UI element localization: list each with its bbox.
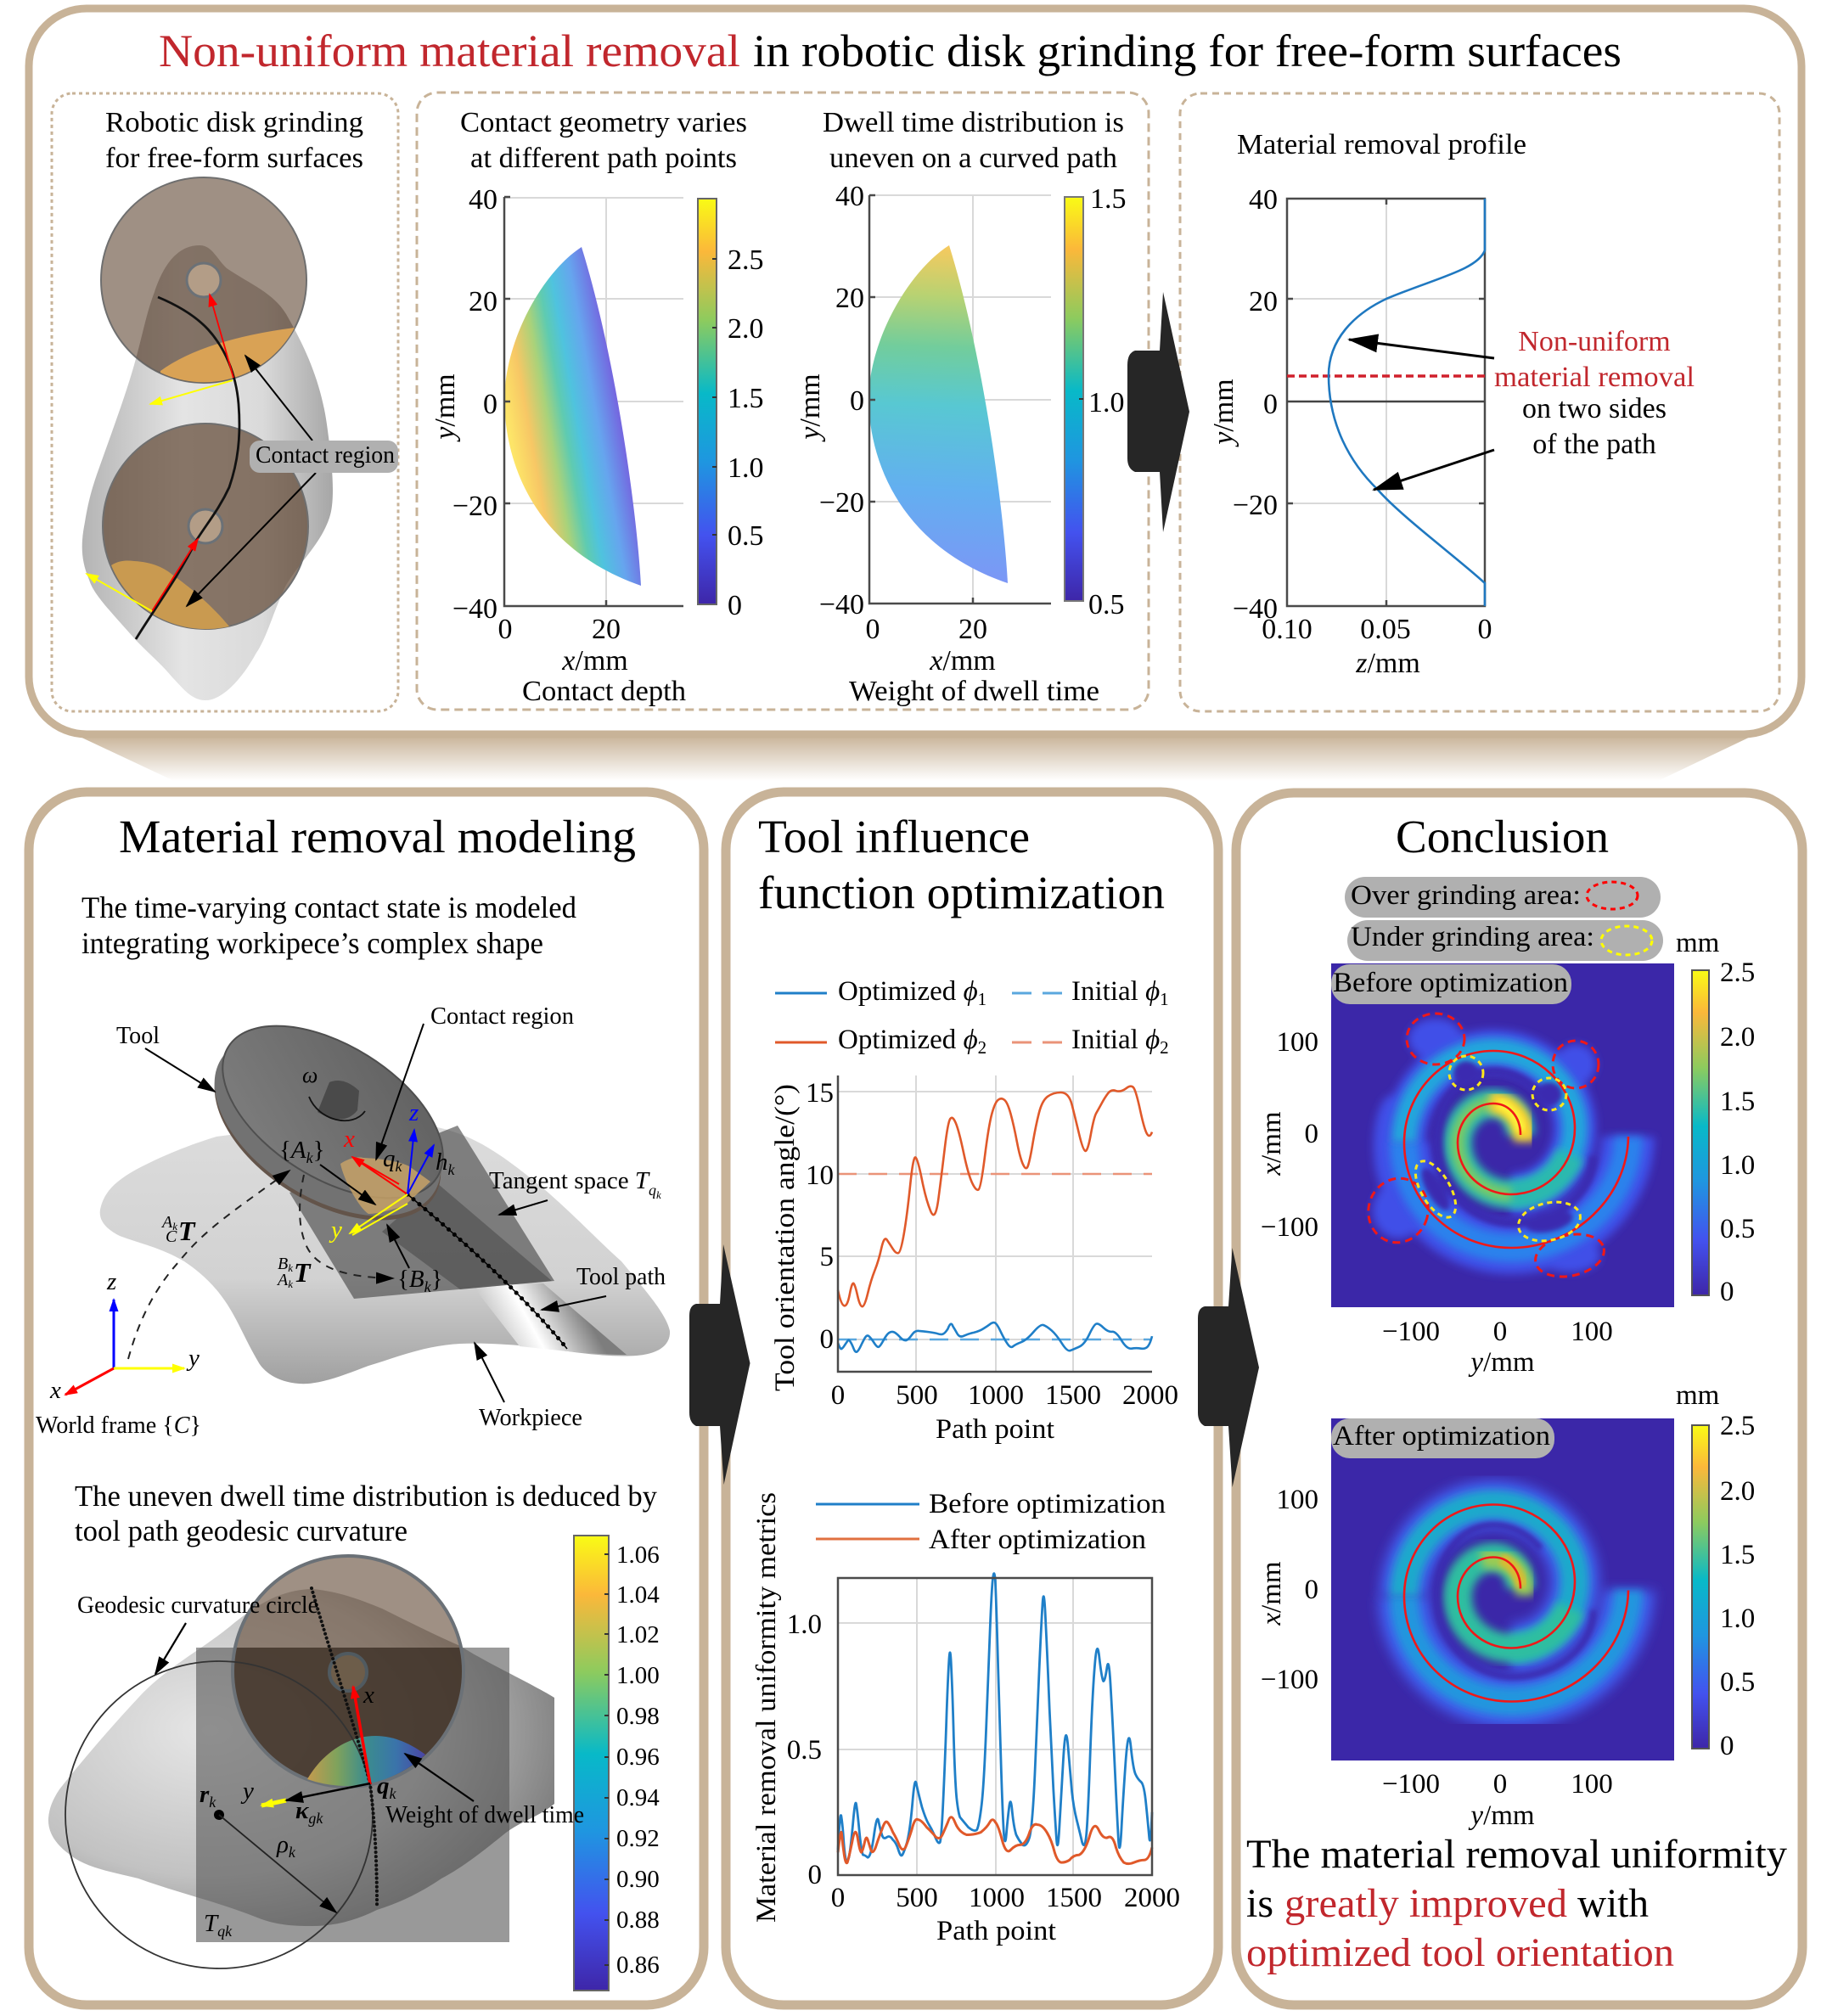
contact region patch bbox=[340, 1157, 430, 1214]
labels: geodesic diagram: k bbox=[289, 1844, 296, 1861]
heading: tool influence function optimization: function optimization bbox=[758, 867, 1165, 918]
arrow: optimization to conclusion bbox=[1198, 1248, 1259, 1487]
labels: 3D diagram: h bbox=[436, 1148, 448, 1176]
icon: lower grinding disk bbox=[103, 424, 308, 629]
dashed transforms bbox=[128, 1171, 393, 1359]
title bbox=[159, 25, 1622, 76]
text: dwell time description: The uneven dwell time distribution is deduced by bbox=[75, 1480, 657, 1513]
labels: geodesic diagram: x bbox=[363, 1682, 374, 1709]
legend: under grinding area: Under grinding area: bbox=[1351, 922, 1594, 952]
chart: heatmap before optimization: 0 bbox=[1304, 1119, 1318, 1149]
legend: orientation angle: 1 bbox=[978, 989, 986, 1009]
workpiece bbox=[82, 245, 333, 700]
panel: contact geometry and dwell time bbox=[417, 93, 1149, 710]
legend: orientation angle: 2 bbox=[1160, 1037, 1169, 1058]
panel: material removal profile bbox=[1180, 93, 1779, 711]
colorbar: before optimization: 1.5 bbox=[1720, 1087, 1755, 1117]
labels: 3D diagram: } bbox=[313, 1137, 325, 1164]
labels: 3D diagram: k bbox=[172, 1220, 177, 1233]
chart: dwell time weight: −20 bbox=[819, 487, 864, 519]
chart: dwell time weight: Weight of dwell time bbox=[849, 676, 1099, 707]
labels: 3D diagram: q bbox=[649, 1182, 656, 1199]
legend: orientation angle: 2 bbox=[978, 1037, 986, 1058]
chart: dwell time weight: −40 bbox=[819, 589, 864, 621]
chart: contact depth: 20 bbox=[592, 614, 621, 645]
chart: heatmap after optimization: 0 bbox=[1493, 1769, 1507, 1800]
labels: 3D diagram: A bbox=[162, 1213, 172, 1232]
tangent plane square bbox=[196, 1648, 509, 1942]
chart: material removal uniformity: Material removal uniformity metrics bbox=[751, 1492, 782, 1923]
colorbar: contact depth bbox=[698, 199, 764, 621]
chart: material removal uniformity: 0 bbox=[831, 1883, 845, 1913]
chart: contact depth: y/mm bbox=[430, 373, 461, 442]
labels: 3D diagram: } bbox=[431, 1266, 443, 1293]
chart: heatmap after optimization: 0 bbox=[1304, 1575, 1318, 1605]
colorbar: contact depth: 1.0 bbox=[728, 452, 764, 484]
heading: robotic disk grinding bbox=[105, 107, 363, 174]
label arrows bbox=[155, 1623, 474, 1801]
heading: robotic disk grinding: Robotic disk grinding bbox=[105, 107, 363, 138]
labels: 3D diagram: Tangent space T bbox=[489, 1167, 649, 1194]
labels: geodesic diagram: Geodesic curvature circle bbox=[77, 1592, 318, 1619]
labels: 3D diagram: y bbox=[186, 1345, 200, 1372]
labels: 3D diagram: z bbox=[106, 1268, 116, 1295]
colorbar: before optimization: 0.5 bbox=[1720, 1214, 1755, 1244]
arrows: yellow tool direction bbox=[87, 380, 233, 611]
labels: 3D diagram: Tool path bbox=[576, 1263, 666, 1290]
labels: 3D diagram: k bbox=[424, 1278, 432, 1295]
label: after optimization: After optimization bbox=[1333, 1421, 1550, 1452]
icon: upper grinding disk bbox=[100, 177, 307, 384]
labels: 3D diagram: {A bbox=[279, 1137, 306, 1164]
heading: material removal modeling: Material removal modeling bbox=[119, 811, 636, 862]
chart: removal profile: 0.10 bbox=[1262, 614, 1312, 645]
text: contact state description bbox=[82, 890, 576, 960]
colorbar: dwell weight: 0.88 bbox=[616, 1906, 660, 1934]
text: dwell time description: tool path geodesic curvature bbox=[75, 1514, 408, 1547]
colorbar: dwell weight: 0.98 bbox=[616, 1703, 660, 1730]
panel: top overview bbox=[29, 8, 1801, 734]
tool disk bbox=[233, 1556, 464, 1787]
heading: dwell time: uneven on a curved path bbox=[829, 143, 1117, 174]
chart: removal profile: −40 bbox=[1233, 593, 1278, 625]
labels: geodesic diagram: y bbox=[240, 1777, 254, 1805]
labels: 3D diagram: x bbox=[343, 1126, 355, 1153]
labels: 3D diagram: ω bbox=[302, 1063, 318, 1087]
world frame axes bbox=[65, 1300, 184, 1395]
chart: tool orientation angle: 2000 bbox=[1122, 1380, 1178, 1411]
chart: dwell time weight: 40 bbox=[835, 181, 864, 212]
panel: material removal modeling bbox=[29, 792, 704, 2005]
chart: heatmap before optimization: 0 bbox=[1493, 1317, 1507, 1347]
chart: heatmap before optimization: x/mm bbox=[1256, 1111, 1287, 1176]
arrows: red tool direction bbox=[152, 295, 233, 611]
chart: contact depth: −20 bbox=[452, 491, 497, 522]
arrow: top panels to profile bbox=[1127, 292, 1189, 532]
heat: after spiral bbox=[1404, 1504, 1628, 1701]
labels: 3D diagram: World frame {C} bbox=[36, 1412, 201, 1439]
conclusion text: with bbox=[1577, 1881, 1649, 1926]
heading: dwell time bbox=[823, 107, 1124, 174]
chart: tool orientation angle: 0 bbox=[820, 1324, 834, 1355]
chart: contact depth: −40 bbox=[452, 593, 497, 625]
colorbar: before optimization: 2.5 bbox=[1720, 957, 1755, 988]
colorbar: dwell weight: 1.06 bbox=[616, 1541, 660, 1569]
labels: 3D diagram: k bbox=[288, 1261, 293, 1274]
chart: heatmap before optimization: y/mm bbox=[1468, 1347, 1535, 1378]
chart: removal profile: 40 bbox=[1249, 184, 1278, 216]
legend: uniformity metrics: After optimization bbox=[929, 1525, 1146, 1555]
colorbar: after optimization: 1.5 bbox=[1720, 1540, 1755, 1570]
workpiece top view bbox=[48, 1589, 554, 1926]
legend: orientation angle: Optimized ϕ bbox=[838, 976, 978, 1007]
heading: tool influence function optimization bbox=[758, 811, 1165, 918]
path: before red spiral bbox=[1404, 1051, 1628, 1248]
rotation arrow omega bbox=[309, 1097, 365, 1120]
chart: removal profile: −20 bbox=[1233, 490, 1278, 521]
colorbar: after optimization: 0 bbox=[1720, 1731, 1734, 1761]
tool path curve bbox=[136, 297, 239, 639]
labels: geodesic diagram: κ bbox=[295, 1797, 308, 1824]
colorbar: dwell weight: 1.04 bbox=[616, 1581, 660, 1609]
labels: 3D diagram: k bbox=[288, 1278, 293, 1290]
chart: tool orientation angle: 1000 bbox=[968, 1380, 1024, 1411]
chart: tool orientation angle: Tool orientation angle/(°) bbox=[770, 1084, 801, 1391]
colorbar: before optimization: 2.0 bbox=[1720, 1022, 1755, 1053]
heading: material removal profile: Material removal profile bbox=[1237, 129, 1526, 160]
heading: contact geometry: Contact geometry varies bbox=[460, 107, 747, 138]
chart: tool orientation angle: Path point bbox=[936, 1414, 1054, 1445]
diagram: 3D tool and workpiece bbox=[36, 991, 670, 1439]
colorbar: dwell time bbox=[1065, 183, 1126, 621]
callout: non-uniform removal: on two sides bbox=[1522, 393, 1667, 424]
colorbar: after optimization: 0.5 bbox=[1720, 1667, 1755, 1698]
legend: orientation angle: Initial ϕ bbox=[1071, 976, 1160, 1007]
labels: 3D diagram bbox=[36, 1002, 666, 1439]
colorbar: dwell time: 0.5 bbox=[1088, 589, 1124, 621]
chart: tool orientation angle: 10 bbox=[806, 1160, 834, 1191]
conclusion text: optimized tool orientation bbox=[1246, 1930, 1674, 1975]
chart: contact depth: x/mm bbox=[561, 645, 628, 677]
labels: geodesic diagram: k bbox=[389, 1785, 397, 1802]
chart: dwell time weight: x/mm bbox=[929, 645, 996, 677]
labels: 3D diagram: y bbox=[329, 1216, 342, 1244]
chart: material removal uniformity: Path point bbox=[936, 1916, 1056, 1946]
legend: under grinding area bbox=[1347, 920, 1663, 961]
heat: dark gap between loops bbox=[1416, 1061, 1593, 1237]
workpiece 3D bbox=[100, 1120, 670, 1384]
chart: material removal uniformity: 1.0 bbox=[787, 1609, 822, 1640]
panel: robotic disk grinding bbox=[52, 93, 398, 711]
labels: 3D diagram: T bbox=[178, 1216, 196, 1246]
callout: non-uniform removal: material removal bbox=[1494, 362, 1695, 393]
radius marker bbox=[214, 1810, 336, 1912]
colorbar: contact depth: 2.0 bbox=[728, 313, 764, 345]
colorbar: dwell time: 1.0 bbox=[1088, 387, 1124, 418]
labels: 3D diagram: Contact region bbox=[430, 1002, 574, 1030]
heading: conclusion: Conclusion bbox=[1396, 811, 1609, 862]
callout: non-uniform removal bbox=[1494, 326, 1695, 460]
colorbar: contact depth: 1.5 bbox=[728, 383, 764, 414]
chart: material removal uniformity: 0.5 bbox=[787, 1735, 822, 1766]
chart: tool orientation angle: 5 bbox=[820, 1242, 834, 1272]
labels: 3D diagram: k bbox=[306, 1149, 314, 1166]
text: contact state description: integrating workipece’s complex shape bbox=[82, 926, 543, 960]
panel: tool influence function optimization bbox=[726, 792, 1218, 2005]
chart: removal profile: 0 bbox=[1263, 389, 1278, 420]
chart: heatmap before optimization: 100 bbox=[1277, 1027, 1318, 1058]
chart: heatmap after optimization: x/mm bbox=[1256, 1561, 1287, 1626]
labels: 3D diagram: x bbox=[49, 1377, 61, 1404]
chart: material removal uniformity: 500 bbox=[896, 1883, 938, 1913]
chart: contact depth: Contact depth bbox=[522, 676, 686, 707]
legend: orientation angle bbox=[775, 976, 1169, 1058]
colorbar: dwell weight bbox=[574, 1536, 660, 1991]
labels: 3D diagram: B bbox=[278, 1255, 288, 1273]
chart: heatmap before optimization: 100 bbox=[1571, 1317, 1613, 1347]
chart: tool orientation angle: 0 bbox=[831, 1380, 845, 1411]
chart: dwell time weight: 20 bbox=[958, 614, 987, 645]
colorbar: dwell weight: 1.02 bbox=[616, 1621, 660, 1648]
chart: tool orientation angle: 500 bbox=[896, 1380, 938, 1411]
chart: removal profile: 0 bbox=[1477, 614, 1492, 645]
heading: dwell time: Dwell time distribution is bbox=[823, 107, 1124, 138]
text: dwell time description bbox=[75, 1480, 657, 1547]
chart: removal profile bbox=[1208, 184, 1492, 679]
chart: dwell time weight: 0 bbox=[866, 614, 880, 645]
heading: tool influence function optimization: Tool influence bbox=[758, 811, 1030, 862]
chart: material removal uniformity: 0 bbox=[808, 1860, 822, 1890]
conclusion text: The material removal uniformity bbox=[1246, 1832, 1787, 1877]
labels: 3D diagram: A bbox=[278, 1271, 288, 1289]
chart: contact depth: 0 bbox=[483, 389, 497, 420]
tangent plane bbox=[289, 1126, 554, 1299]
title: in robotic disk grinding for free-form surfaces bbox=[753, 25, 1622, 76]
local frame axes bbox=[350, 1130, 434, 1235]
colorbar: before optimization: mm bbox=[1676, 928, 1720, 958]
chart: removal profile: y/mm bbox=[1208, 379, 1239, 447]
chart: removal profile: z/mm bbox=[1355, 648, 1420, 679]
conclusion text: greatly improved bbox=[1284, 1881, 1567, 1926]
colorbar: dwell weight: 0.92 bbox=[616, 1825, 660, 1852]
labels: 3D diagram: {B bbox=[397, 1266, 424, 1293]
chart: heatmap after optimization: −100 bbox=[1382, 1769, 1440, 1800]
chart: material removal uniformity: 1500 bbox=[1046, 1883, 1102, 1913]
colorbar: after optimization: 2.0 bbox=[1720, 1476, 1755, 1507]
legend: orientation angle: 1 bbox=[1160, 989, 1169, 1009]
label: before optimization: Before optimization bbox=[1333, 968, 1568, 998]
label: contact region: Contact region bbox=[256, 441, 395, 469]
callout: non-uniform removal: Non-uniform bbox=[1518, 326, 1671, 357]
chart: heatmap after optimization: −100 bbox=[1261, 1665, 1318, 1695]
chart: dwell time weight: 0 bbox=[850, 385, 864, 417]
labels: geodesic diagram: T bbox=[204, 1910, 217, 1937]
colorbar: dwell time: 1.5 bbox=[1090, 183, 1126, 215]
labels: geodesic diagram bbox=[77, 1592, 584, 1940]
chart: material removal uniformity: 1000 bbox=[969, 1883, 1025, 1913]
labels: geodesic diagram: r bbox=[200, 1781, 209, 1808]
label arrows bbox=[145, 1024, 606, 1402]
heat: dark gap between loops bbox=[1436, 1525, 1593, 1677]
labels: geodesic diagram: k bbox=[209, 1794, 216, 1811]
chart: heatmap before optimization: −100 bbox=[1261, 1212, 1318, 1243]
labels: 3D diagram: q bbox=[383, 1145, 396, 1172]
chart: contact depth: 40 bbox=[469, 184, 497, 216]
colorbar: contact depth: 2.5 bbox=[728, 244, 764, 276]
arrows: contact region pointers bbox=[187, 356, 316, 606]
chart: contact depth bbox=[430, 184, 686, 707]
connector: gradient funnel below top panel bbox=[76, 735, 1754, 781]
legend: over grinding area: Over grinding area: bbox=[1351, 880, 1581, 911]
colorbar: dwell weight: 0.86 bbox=[616, 1951, 660, 1979]
panel: conclusion bbox=[1236, 793, 1802, 2005]
labels: 3D diagram: z bbox=[408, 1099, 419, 1126]
colorbar: dwell weight: 1.00 bbox=[616, 1662, 660, 1689]
heading: contact geometry: at different path points bbox=[470, 143, 737, 174]
colorbar: contact depth: 0 bbox=[728, 590, 742, 621]
tool path dots bbox=[312, 1588, 377, 1905]
labels: geodesic diagram: Weight of dwell time bbox=[385, 1801, 584, 1828]
labels: 3D diagram: C bbox=[166, 1227, 177, 1246]
conclusion text: is bbox=[1246, 1881, 1273, 1926]
conclusion text bbox=[1246, 1832, 1787, 1975]
heat: before spiral bbox=[1373, 1019, 1628, 1272]
labels: 3D diagram: k bbox=[656, 1188, 661, 1201]
labels: geodesic diagram: ρ bbox=[277, 1831, 289, 1858]
colorbar: before optimization bbox=[1676, 928, 1755, 1307]
colorbar: after optimization: 1.0 bbox=[1720, 1603, 1755, 1634]
colorbar: before optimization: 1.0 bbox=[1720, 1150, 1755, 1181]
legend: orientation angle: Initial ϕ bbox=[1071, 1025, 1160, 1055]
callout: non-uniform removal: of the path bbox=[1532, 429, 1656, 460]
chart: heatmap after optimization: 100 bbox=[1277, 1485, 1318, 1515]
colorbar: after optimization: mm bbox=[1676, 1380, 1720, 1411]
colorbar: after optimization bbox=[1676, 1380, 1755, 1761]
chart: heatmap before optimization bbox=[1256, 963, 1674, 1378]
chart: heatmap after optimization: y/mm bbox=[1468, 1800, 1535, 1831]
markers: under grinding regions bbox=[1408, 1056, 1584, 1246]
labels: geodesic diagram: qk bbox=[217, 1923, 233, 1940]
colorbar: contact depth: 0.5 bbox=[728, 520, 764, 552]
chart: tool orientation angle: 15 bbox=[806, 1078, 834, 1109]
text: contact state description: The time-varying contact state is modeled bbox=[82, 890, 576, 924]
chart: heatmap after optimization bbox=[1256, 1418, 1674, 1831]
diagram: geodesic curvature bbox=[48, 1556, 584, 1968]
colorbar: before optimization: 0 bbox=[1720, 1277, 1734, 1307]
arrow: modeling to optimization bbox=[689, 1244, 750, 1485]
legend: uniformity metrics: Before optimization bbox=[929, 1489, 1166, 1519]
chart: dwell time weight: 20 bbox=[835, 283, 864, 314]
labels: geodesic diagram: q bbox=[377, 1772, 389, 1800]
title: Non-uniform material removal bbox=[159, 25, 740, 76]
chart: removal profile: 20 bbox=[1249, 286, 1278, 317]
chart: contact depth: 20 bbox=[469, 286, 497, 317]
chart: contact depth: 0 bbox=[497, 614, 513, 645]
legend: over grinding area bbox=[1345, 877, 1661, 918]
chart: tool orientation angle bbox=[770, 1075, 1178, 1445]
chart: tool orientation angle: 1500 bbox=[1045, 1380, 1101, 1411]
colorbar: dwell weight: 0.90 bbox=[616, 1866, 660, 1893]
path: after red spiral bbox=[1404, 1504, 1628, 1701]
tool disk bbox=[183, 991, 473, 1258]
labels: 3D diagram: Tool bbox=[116, 1022, 160, 1049]
geodesic curvature circle bbox=[65, 1661, 373, 1968]
arrows: profile sides bbox=[1349, 340, 1494, 490]
labels: 3D diagram: T bbox=[294, 1257, 312, 1288]
chart: heatmap before optimization: −100 bbox=[1382, 1317, 1440, 1347]
tool path dots bbox=[408, 1194, 567, 1349]
labels: 3D diagram: k bbox=[396, 1158, 402, 1175]
labels: 3D diagram: k bbox=[448, 1161, 455, 1178]
colorbar: after optimization: 2.5 bbox=[1720, 1411, 1755, 1441]
heading: contact geometry bbox=[460, 107, 747, 174]
chart: dwell time weight bbox=[795, 181, 1099, 707]
chart: removal profile: 0.05 bbox=[1360, 614, 1411, 645]
labels: 3D diagram: Workpiece bbox=[479, 1404, 582, 1431]
chart: heatmap after optimization: 100 bbox=[1571, 1769, 1613, 1800]
colorbar: dwell weight: 0.94 bbox=[616, 1784, 660, 1811]
legend: orientation angle: Optimized ϕ bbox=[838, 1025, 978, 1055]
chart: dwell time weight: y/mm bbox=[795, 373, 826, 442]
chart: material removal uniformity: 2000 bbox=[1124, 1883, 1180, 1913]
chart: material removal uniformity bbox=[751, 1492, 1180, 1946]
legend: uniformity metrics bbox=[816, 1489, 1166, 1555]
labels: geodesic diagram: gk bbox=[308, 1810, 323, 1827]
markers: over grinding regions bbox=[1361, 1014, 1608, 1283]
heading: robotic disk grinding: for free-form surfaces bbox=[105, 143, 363, 174]
colorbar: dwell weight: 0.96 bbox=[616, 1744, 660, 1771]
arrows: frame vectors bbox=[261, 1687, 370, 1805]
